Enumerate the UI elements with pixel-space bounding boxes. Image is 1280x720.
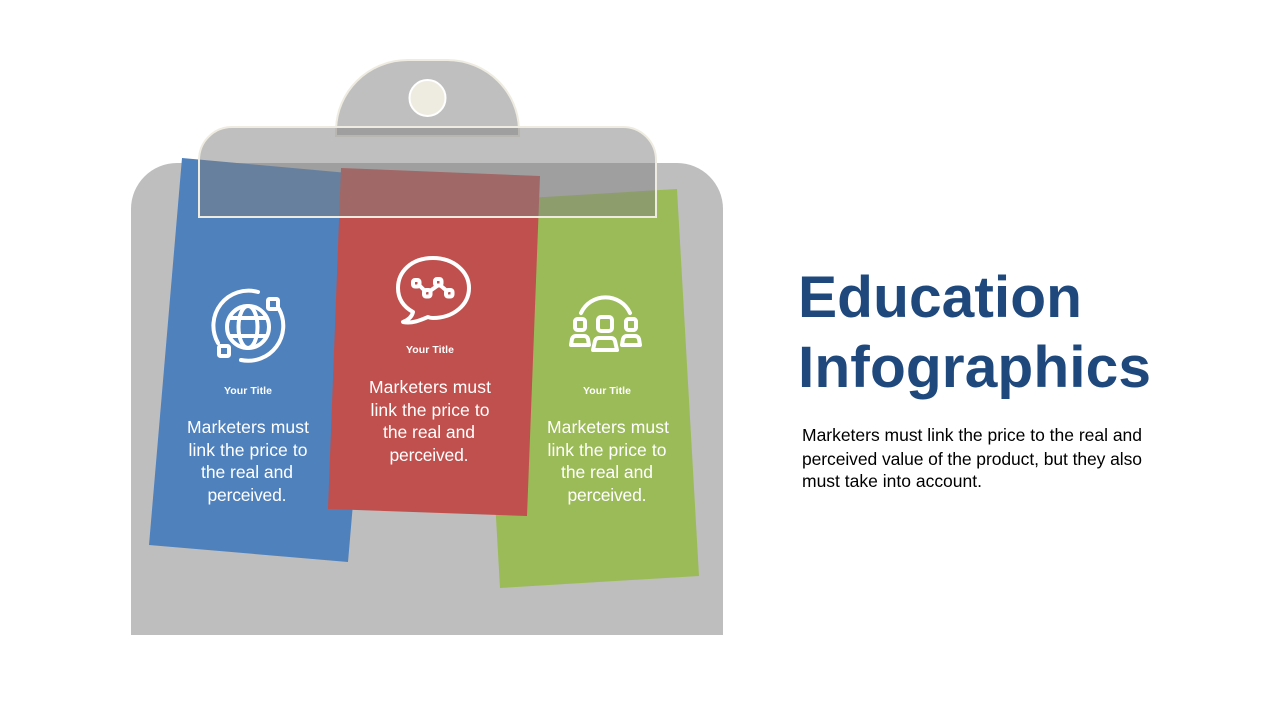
panel: green card xyxy=(478,189,699,588)
card text: green: perceived. xyxy=(568,485,646,505)
card text: blue: Marketers must xyxy=(187,417,309,437)
card text: blue: perceived. xyxy=(208,485,286,505)
title: Infographics xyxy=(798,335,1151,400)
panel: blue card xyxy=(149,158,381,562)
card text: green: link the price to xyxy=(548,440,666,460)
description text: Marketers must link the price to the real and xyxy=(802,425,1142,445)
card text: red: link the price to xyxy=(370,400,490,420)
icon: group of people xyxy=(571,297,640,350)
clip plate xyxy=(199,127,656,217)
description text: perceived value of the product, but they also xyxy=(802,449,1142,469)
title xyxy=(798,265,1151,400)
card text: green: the real and xyxy=(561,462,653,482)
card title: red: Your Title xyxy=(406,344,454,356)
card text: red xyxy=(369,377,491,465)
card text: blue: the real and xyxy=(201,462,293,482)
description text: must take into account. xyxy=(802,471,982,491)
card title: blue: Your Title xyxy=(224,385,272,397)
card text: red: perceived. xyxy=(390,445,468,465)
clip hole xyxy=(410,80,446,116)
clipboard board xyxy=(131,163,723,635)
description text xyxy=(802,425,1142,491)
title: Education xyxy=(798,265,1082,330)
card text: green xyxy=(547,417,669,505)
card text: red: Marketers must xyxy=(369,377,491,397)
clip tab xyxy=(336,60,519,136)
icon: globe with orbit xyxy=(213,291,283,361)
icon: speech bubble with line chart xyxy=(398,258,469,323)
panel: red card xyxy=(328,168,540,516)
card title: green: Your Title xyxy=(583,385,631,397)
card text: blue: link the price to xyxy=(188,440,308,460)
card text: green: Marketers must xyxy=(547,417,669,437)
card text: red: the real and xyxy=(383,422,475,442)
card text: blue xyxy=(187,417,309,505)
